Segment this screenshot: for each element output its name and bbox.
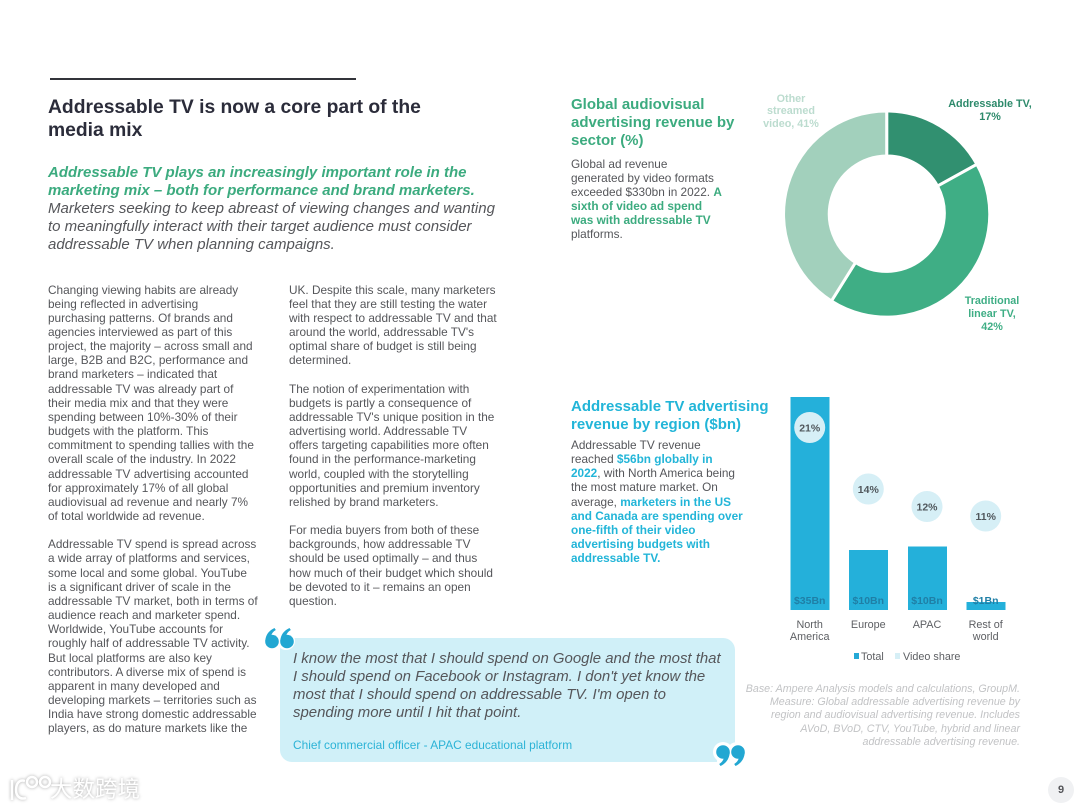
heading: global audiovisual revenue: advertising revenue by bbox=[571, 114, 734, 131]
body text column 1: of total worldwide ad revenue. bbox=[48, 509, 205, 523]
body text column 2: how much of their budget which should bbox=[289, 566, 493, 580]
intro text block: addressable TV when planning campaigns. bbox=[48, 236, 335, 253]
donut label: traditional linear TV: Traditional bbox=[965, 295, 1019, 307]
legend: Total bbox=[861, 651, 884, 663]
category labels: North bbox=[796, 619, 823, 631]
donut label: other streamed video bbox=[763, 93, 819, 130]
text block: global ad revenue: generated by video formats bbox=[571, 171, 714, 185]
body text column 2: optimal share of budget is still being bbox=[289, 339, 477, 353]
body text column 1: audience reach and marketer spend. bbox=[48, 608, 240, 622]
body text column 2: should be used optimally – and thus bbox=[289, 551, 477, 565]
text block: addressable TV revenue: 2022, with North America being bbox=[571, 466, 735, 480]
body text column 2: relished by brand marketers. bbox=[289, 495, 438, 509]
segment: traditional linear TV 42% bbox=[831, 164, 990, 317]
category labels: APAC bbox=[913, 619, 941, 631]
quote attribution: Chief commercial officer - APAC educational platform bbox=[293, 738, 572, 752]
icon: watermark mark bbox=[8, 774, 53, 802]
text block: global ad revenue: Global ad revenue bbox=[571, 156, 667, 170]
bar: Rest of world: $1Bn bbox=[973, 595, 999, 607]
legend: Video share bbox=[903, 651, 960, 663]
body text column 2: backgrounds, how addressable TV bbox=[289, 537, 470, 551]
body text column 1: Worldwide, YouTube accounts for bbox=[48, 622, 223, 636]
body text column 1: spending between 10%-30% of their bbox=[48, 410, 238, 424]
body text column 1: budgets with the platform. This bbox=[48, 424, 208, 438]
body text column 2: with respect to addressable TV and that bbox=[289, 311, 497, 325]
body text column 1: project, the majority – across small and bbox=[48, 339, 253, 353]
text block: global ad revenue: was with addressable TV bbox=[571, 213, 711, 227]
body text column 1: apparent in many developed and bbox=[48, 679, 220, 693]
quote background bbox=[280, 638, 735, 762]
intro text block: Marketers seeking to keep abreast of viewing changes and wanting bbox=[48, 200, 495, 217]
text block: addressable TV revenue: reached $56bn globally in bbox=[571, 452, 713, 466]
base and measure note: Base: Ampere Analysis models and calculations, GroupM. bbox=[746, 683, 1020, 695]
bar: Europe bbox=[849, 474, 888, 610]
body text column 2: feel that they are still testing the water bbox=[289, 297, 487, 311]
body text column 1: brand marketers – indicated that bbox=[48, 367, 217, 381]
bar: North America: $35Bn bbox=[794, 595, 825, 607]
bar: APAC: 12% bbox=[916, 502, 938, 514]
intro text block bbox=[48, 164, 495, 253]
body text column 2: world, coupled with the storytelling bbox=[289, 467, 469, 481]
text block: addressable TV revenue: one-fifth of their video bbox=[571, 523, 696, 537]
body text column 2: For media buyers from both of these bbox=[289, 523, 479, 537]
body text column 1: commitment to spending tallies with the bbox=[48, 438, 254, 452]
title: media mix bbox=[48, 120, 142, 141]
body text column 1: audiovisual ad revenue and nearly 7% bbox=[48, 495, 248, 509]
donut label: addressable TV: Addressable TV, bbox=[948, 98, 1032, 110]
donut label: other streamed video: Other bbox=[777, 93, 805, 105]
text block: addressable TV revenue bbox=[571, 438, 743, 565]
bar: Rest of world: 11% bbox=[975, 511, 997, 523]
body text column 1: contributors. A diverse mix of spend is bbox=[48, 665, 246, 679]
intro text block: marketing mix – both for performance and brand marketers. bbox=[48, 182, 475, 199]
body text column 1: their media mix and that they were bbox=[48, 396, 228, 410]
heading: addressable TV revenue by region bbox=[571, 398, 769, 433]
body text column 2: be devoted to it – remains an open bbox=[289, 580, 471, 594]
intro text block: to meaningfully interact with their target audience must consider bbox=[48, 218, 472, 235]
category labels: world bbox=[972, 631, 999, 643]
base and measure note: region and audiovisual advertising revenue. Includes bbox=[771, 709, 1020, 721]
body text column 2: budgets is partly a consequence of bbox=[289, 396, 471, 410]
base and measure note: Measure: Global addressable advertising revenue by bbox=[770, 696, 1020, 708]
body text column 1: purchasing patterns. Of brands and bbox=[48, 311, 233, 325]
icon: closing quote mark bbox=[713, 742, 745, 766]
body text column 2: addressable TV's unique position in the bbox=[289, 410, 494, 424]
text block: addressable TV revenue: average, marketers in the US bbox=[571, 495, 731, 509]
body text column 1: But local platforms are also key bbox=[48, 651, 212, 665]
text block: addressable TV revenue: the most mature market. On bbox=[571, 480, 718, 494]
text block: addressable TV revenue: and Canada are spending over bbox=[571, 509, 743, 523]
donut label: traditional linear TV: 42% bbox=[981, 321, 1003, 333]
body text column 1: large, B2B and B2C, performance and bbox=[48, 353, 248, 367]
bar: APAC: $10Bn bbox=[911, 595, 943, 607]
body text column 1: is a significant driver of scale in the bbox=[48, 580, 231, 594]
quote text: most that I should spend on addressable TV. I'm open to bbox=[293, 686, 666, 703]
donut label: traditional linear TV: linear TV, bbox=[968, 308, 1016, 320]
bar: Europe: 14% bbox=[858, 484, 879, 496]
legend bbox=[854, 651, 960, 663]
panel: quote callout bbox=[265, 628, 745, 766]
text block: addressable TV revenue: Addressable TV revenue bbox=[571, 438, 701, 452]
quote text bbox=[293, 650, 722, 721]
text block: global ad revenue: exceeded $330bn in 2022. A bbox=[571, 185, 722, 199]
body text column 1 bbox=[48, 282, 258, 735]
heading: global audiovisual revenue bbox=[571, 96, 734, 149]
body text column 1: overall scale of the industry. In 2022 bbox=[48, 452, 236, 466]
page number badge: 9 bbox=[1058, 784, 1064, 796]
bar: Rest of world bbox=[966, 500, 1006, 610]
body text column 1: some local and some global. YouTube bbox=[48, 566, 247, 580]
quote text: I should spend on Facebook or Instagram. I don't yet know the bbox=[293, 668, 705, 685]
body text column 2 bbox=[289, 282, 497, 608]
bar: North America bbox=[790, 397, 830, 610]
page number badge bbox=[1048, 777, 1074, 803]
bar: APAC bbox=[908, 491, 947, 610]
body text column 1: Addressable TV spend is spread across bbox=[48, 537, 256, 551]
text block: addressable TV revenue: advertising budgets with bbox=[571, 537, 710, 551]
bar chart: revenue by region bbox=[790, 397, 1006, 663]
body text column 2: advertising world. Addressable TV bbox=[289, 424, 467, 438]
segment: addressable TV 17% bbox=[887, 111, 977, 186]
donut label: other streamed video: video, 41% bbox=[763, 118, 819, 130]
body text column 1: addressable TV market, both in terms of bbox=[48, 594, 258, 608]
body text column 2: offers targeting capabilities more often bbox=[289, 438, 489, 452]
segment: other streamed video 41% bbox=[784, 111, 887, 301]
body text column 1: developing markets – territories such as bbox=[48, 693, 257, 707]
bar: Europe: $10Bn bbox=[853, 595, 884, 607]
body text column 1: addressable TV was already part of bbox=[48, 382, 233, 396]
body text column 2: The notion of experimentation with bbox=[289, 382, 469, 396]
body text column 1: for approximately 17% of all global bbox=[48, 481, 228, 495]
body text column 1: roughly half of addressable TV activity. bbox=[48, 636, 250, 650]
heading: addressable TV revenue by region: revenue by region ($bn) bbox=[571, 416, 741, 433]
body text column 1: agencies interviewed as part of this bbox=[48, 325, 232, 339]
body text column 2: question. bbox=[289, 594, 337, 608]
body text column 1: addressable TV advertising accounted bbox=[48, 467, 248, 481]
title: Addressable TV is now a core part of the bbox=[48, 97, 421, 118]
body text column 1: players, as do mature markets like the bbox=[48, 721, 247, 735]
donut label: traditional linear TV bbox=[964, 295, 1019, 333]
body text column 1: being reflected in advertising bbox=[48, 297, 198, 311]
body text column 2: found in the performance-marketing bbox=[289, 452, 476, 466]
quote text: I know the most that I should spend on Google and the most that bbox=[293, 650, 721, 667]
body text column 2: opportunities and premium inventory bbox=[289, 481, 480, 495]
text block: addressable TV revenue: addressable TV. bbox=[571, 551, 660, 565]
body text column 1: a wide array of platforms and services, bbox=[48, 551, 250, 565]
donut label: other streamed video: streamed bbox=[767, 105, 815, 117]
base and measure note: AVoD, BVoD, CTV, YouTube, hybrid and linear bbox=[800, 723, 1020, 735]
donut label: addressable TV: 17% bbox=[979, 111, 1001, 123]
base and measure note: addressable advertising revenue. bbox=[863, 736, 1020, 748]
text block: global ad revenue: sixth of video ad spend bbox=[571, 199, 702, 213]
text block: global ad revenue bbox=[571, 156, 722, 241]
category labels: Europe bbox=[851, 619, 886, 631]
body text column 2: UK. Despite this scale, many marketers bbox=[289, 282, 496, 296]
donut label: addressable TV bbox=[948, 98, 1032, 123]
text block: global ad revenue: platforms. bbox=[571, 227, 623, 241]
category labels bbox=[790, 619, 1004, 643]
watermark text: 大数跨境 bbox=[50, 777, 140, 802]
body text column 2: determined. bbox=[289, 353, 351, 367]
body text column 2: around the world, addressable TV's bbox=[289, 325, 474, 339]
body text column 1: Changing viewing habits are already bbox=[48, 282, 238, 296]
heading: global audiovisual revenue: sector (%) bbox=[571, 132, 644, 149]
quote text: spending more until I hit that point. bbox=[293, 704, 521, 721]
icon: opening quote mark bbox=[265, 628, 295, 650]
heading: addressable TV revenue by region: Addressable TV advertising bbox=[571, 398, 769, 415]
title bbox=[48, 97, 421, 141]
category labels: America bbox=[790, 631, 830, 643]
bar: North America: 21% bbox=[799, 422, 821, 434]
category labels: Rest of bbox=[969, 619, 1004, 631]
intro text block: Addressable TV plays an increasingly important role in the bbox=[48, 164, 466, 180]
base and measure note bbox=[746, 683, 1020, 748]
donut chart bbox=[785, 112, 988, 316]
body text column 1: India have strong domestic addressable bbox=[48, 707, 257, 721]
watermark logo bbox=[8, 774, 140, 802]
heading: global audiovisual revenue: Global audiovisual bbox=[571, 96, 704, 113]
